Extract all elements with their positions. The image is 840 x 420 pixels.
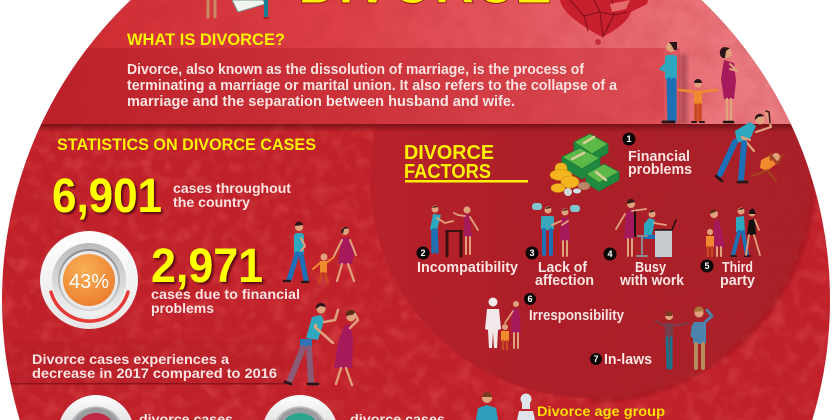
gauge: 43%: 43% <box>69 271 109 293</box>
factor 2: incompatibility <box>416 206 518 276</box>
text block: decrease in 2017: decrease in 2017 compared to 2016 <box>32 365 277 381</box>
heading: statistics: STATISTICS ON DIVORCE CASES <box>57 136 316 154</box>
factor 1: financial problems: Financial <box>628 149 690 165</box>
factor 1: financial problems <box>622 132 692 178</box>
stat: 2,971 cases <box>151 240 300 316</box>
heading: divorce factors: FACTORS <box>404 161 491 183</box>
text block: decrease in 2017: Divorce cases experiences a <box>32 351 229 367</box>
stat: 6,901 cases: the country <box>173 194 250 210</box>
illustration: separated family <box>661 42 737 122</box>
illustration: father hitting child <box>716 111 782 182</box>
factor 6: irresponsibility: 6 <box>527 294 533 304</box>
factor 7: in-laws <box>590 306 712 368</box>
stat: 2,971 cases: cases due to financial <box>151 286 300 302</box>
gauge: 43% <box>40 231 138 329</box>
text block: definition <box>127 62 618 110</box>
top illustration: couple holding divorce paper <box>208 0 268 18</box>
factor 6: irresponsibility <box>485 293 624 349</box>
text block: decrease in 2017 <box>32 351 277 381</box>
illustration: family walking <box>284 221 356 283</box>
gauge: 2016 divorce cases <box>264 395 445 420</box>
icon: broken heart <box>560 0 648 45</box>
heading: divorce factors <box>404 142 528 183</box>
factor 3: lack of affection <box>526 203 594 289</box>
factor 4: busy with work: with work <box>619 273 685 289</box>
factor 4: busy with work <box>604 199 685 289</box>
factor 7: in-laws: In-laws <box>604 352 652 368</box>
factor 4: busy with work: 4 <box>607 249 613 259</box>
factor 2: incompatibility: Incompatibility <box>417 260 518 276</box>
text block: definition: Divorce, also known as the dissolution of marriage, is the process of <box>127 62 584 78</box>
factor 3: lack of affection: Lack of <box>538 260 587 276</box>
factor 4: busy with work: Busy <box>635 260 666 276</box>
heading: what is divorce: WHAT IS DIVORCE? <box>127 30 285 49</box>
factor 6: irresponsibility: Irresponsibility <box>529 308 624 324</box>
factor 3: lack of affection: affection <box>535 273 594 289</box>
factor 2: incompatibility: 2 <box>420 248 426 258</box>
factor 5: third party: 5 <box>704 261 710 271</box>
factor 1: financial problems: problems <box>628 162 692 178</box>
heading: divorce factors: DIVORCE <box>404 142 494 164</box>
divorce age group: figures and label: Divorce age group <box>537 403 665 419</box>
text block: definition: terminating a marriage or marital union. It also refers to the collapse of a <box>127 78 618 94</box>
icon: money and coins <box>550 134 619 196</box>
factor 5: third party: party <box>720 273 755 289</box>
factor 3: lack of affection: 3 <box>529 248 535 258</box>
factor 5: third party: Third <box>722 260 753 276</box>
factor 5: third party <box>700 208 760 289</box>
factor 7: in-laws: 7 <box>593 354 599 364</box>
stat: 2,971 cases: problems <box>151 300 214 316</box>
gauge: 2017 divorce cases <box>60 395 233 420</box>
illustration: man threatening woman <box>285 303 358 385</box>
factor 1: financial problems: 1 <box>626 134 632 144</box>
text block: definition: marriage and the separation between husband and wife. <box>127 94 515 110</box>
divorce age group: figures and label <box>476 392 665 420</box>
stat: 6,901 cases <box>52 170 291 223</box>
stat: 6,901 cases: 6,901 <box>52 170 162 223</box>
stat: 6,901 cases: cases throughout <box>173 180 291 196</box>
stat: 2,971 cases: 2,971 <box>151 240 263 293</box>
